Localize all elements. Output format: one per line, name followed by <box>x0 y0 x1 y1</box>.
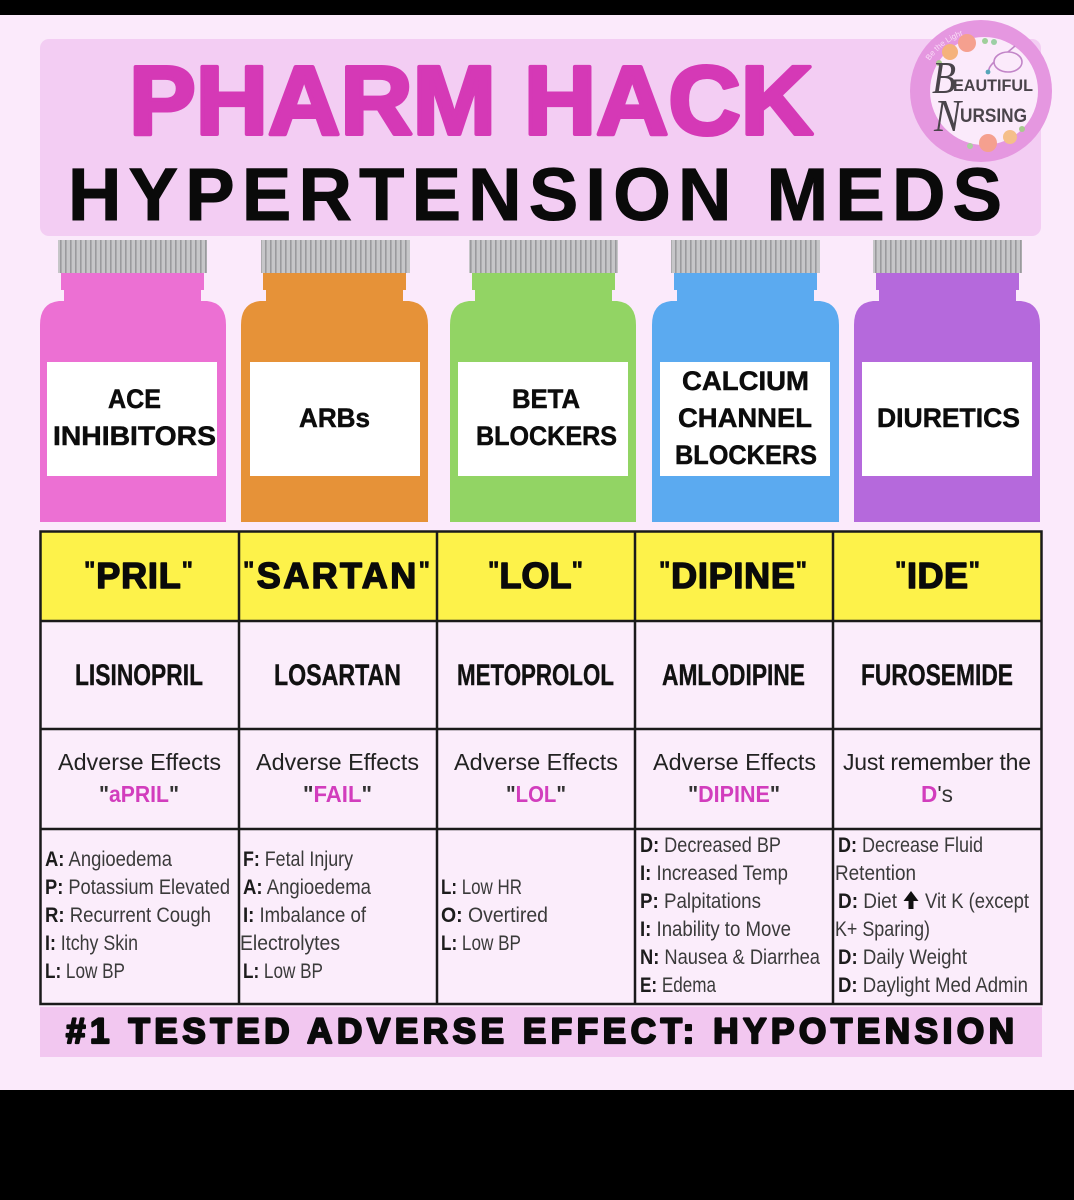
bottle: ace inhibitors <box>40 240 226 522</box>
logo: beautiful nursing: Be the Light <box>926 30 962 60</box>
bottle: arbs <box>241 240 428 522</box>
list: the ds <box>835 834 1029 997</box>
footer banner <box>40 1007 1042 1057</box>
title: pharm hack: PHARM HACK <box>129 46 813 155</box>
list: fail effects: F: Fetal Injury <box>243 848 353 871</box>
row: mnemonic headings: "DIPINE" <box>688 781 780 807</box>
row: mnemonic headings: Just remember the <box>843 749 1031 775</box>
row: mnemonic headings: Adverse Effects <box>256 749 419 775</box>
logo wordmark: nursing: N <box>933 90 963 141</box>
label text <box>675 366 817 470</box>
row: drug suffixes: " <box>659 557 670 584</box>
list: lol effects: L: Low BP <box>441 932 521 955</box>
label text: BLOCKERS <box>675 440 817 470</box>
list: dipine effects <box>640 834 820 997</box>
label text: INHIBITORS <box>53 421 216 451</box>
row: drug suffixes: " <box>243 557 254 584</box>
list: april effects: P: Potassium Elevated <box>45 876 230 899</box>
row: drug suffixes: " <box>895 557 906 584</box>
list: fail effects: Electrolytes <box>240 932 340 955</box>
list: the ds: Retention <box>835 862 916 885</box>
list: dipine effects: E: Edema <box>640 974 716 997</box>
list: the ds: D: Daylight Med Admin <box>838 974 1028 997</box>
list: the ds: D: Diet <box>838 890 897 913</box>
list: dipine effects: I: Inability to Move <box>640 918 791 941</box>
list: dipine effects: D: Decreased BP <box>640 834 781 857</box>
row: mnemonic headings: Adverse Effects <box>58 749 221 775</box>
row: mnemonic headings <box>58 749 1031 807</box>
row: example drugs: LOSARTAN <box>274 659 401 692</box>
row: drug suffixes: " <box>488 557 499 584</box>
row: drug suffixes: DIPINE <box>671 555 795 596</box>
row: mnemonic headings: "LOL" <box>506 781 566 807</box>
row: drug suffixes: " <box>419 557 430 584</box>
row: drug suffixes: " <box>796 557 807 584</box>
list: the ds: Vit K (except <box>925 890 1029 913</box>
label text: ARBs <box>299 403 370 433</box>
list: the ds: D: Daily Weight <box>838 946 967 969</box>
logo: beautiful nursing <box>910 20 1052 162</box>
label text: DIURETICS <box>877 403 1020 433</box>
row: drug suffixes: " <box>969 557 980 584</box>
list: fail effects: A: Angioedema <box>243 876 371 899</box>
list: lol effects <box>441 876 548 955</box>
list: april effects: I: Itchy Skin <box>45 932 138 955</box>
row: drug suffixes: SARTAN <box>257 555 416 596</box>
row: example drugs <box>75 659 1013 692</box>
logo wordmark: nursing: URSING <box>960 106 1027 127</box>
list: april effects: A: Angioedema <box>45 848 172 871</box>
label text: BETA <box>512 384 580 414</box>
label text: CALCIUM <box>682 366 809 396</box>
row: drug suffixes: " <box>84 557 95 584</box>
comparison table <box>40 531 1042 1004</box>
logo wordmark: beautiful: EAUTIFUL <box>953 76 1033 95</box>
row: mnemonic headings: Adverse Effects <box>653 749 816 775</box>
icon: stethoscope <box>986 46 1022 74</box>
row: drug suffixes: " <box>182 557 193 584</box>
row: example drugs: FUROSEMIDE <box>861 659 1013 692</box>
list: the ds: D: Decrease Fluid <box>838 834 983 857</box>
title: hypertension meds: HYPERTENSION MEDS <box>68 153 1002 236</box>
logo wordmark: beautiful: B <box>932 52 956 103</box>
row: drug suffixes <box>84 555 980 596</box>
list: dipine effects: P: Palpitations <box>640 890 761 913</box>
row: drug suffixes: PRIL <box>96 555 181 596</box>
bottle: diuretics <box>854 240 1040 522</box>
row: mnemonic headings: D's <box>921 781 953 807</box>
row: drug suffixes: IDE <box>907 555 968 596</box>
label text: CHANNEL <box>678 403 812 433</box>
row: mnemonic headings: "aPRIL" <box>99 781 179 807</box>
label text: BLOCKERS <box>476 421 617 451</box>
bottle: calcium channel blockers <box>652 240 839 522</box>
list: dipine effects: I: Increased Temp <box>640 862 788 885</box>
row: drug suffixes: " <box>572 557 583 584</box>
bottle: beta blockers <box>450 240 636 522</box>
row: example drugs: AMLODIPINE <box>662 659 805 692</box>
list: fail effects: I: Imbalance of <box>243 904 366 927</box>
list: april effects: L: Low BP <box>45 960 125 983</box>
list: lol effects: L: Low HR <box>441 876 522 899</box>
row: drug suffixes: LOL <box>499 555 572 596</box>
list: april effects: R: Recurrent Cough <box>45 904 211 927</box>
label text <box>53 384 216 451</box>
list: the ds: K+ Sparing) <box>835 918 930 941</box>
list: fail effects <box>240 848 371 983</box>
icon: flowers top <box>936 34 997 66</box>
logo wordmark: nursing <box>933 90 1027 141</box>
title panel <box>40 39 1041 236</box>
list: lol effects: O: Overtired <box>441 904 548 927</box>
icon: up arrow <box>904 891 918 909</box>
footer text: #1 TESTED ADVERSE EFFECT: HYPOTENSION <box>66 1012 1014 1051</box>
label text: ACE <box>108 384 161 414</box>
logo wordmark: beautiful <box>932 52 1033 103</box>
list: dipine effects: N: Nausea & Diarrhea <box>640 946 820 969</box>
label text <box>476 384 617 451</box>
row: mnemonic headings: "FAIL" <box>303 781 372 807</box>
row: example drugs: METOPROLOL <box>457 659 614 692</box>
row: example drugs: LISINOPRIL <box>75 659 203 692</box>
row: mnemonic headings: Adverse Effects <box>454 749 618 775</box>
list: fail effects: L: Low BP <box>243 960 323 983</box>
list: april effects <box>45 848 230 983</box>
icon: flowers bottom <box>967 126 1025 152</box>
